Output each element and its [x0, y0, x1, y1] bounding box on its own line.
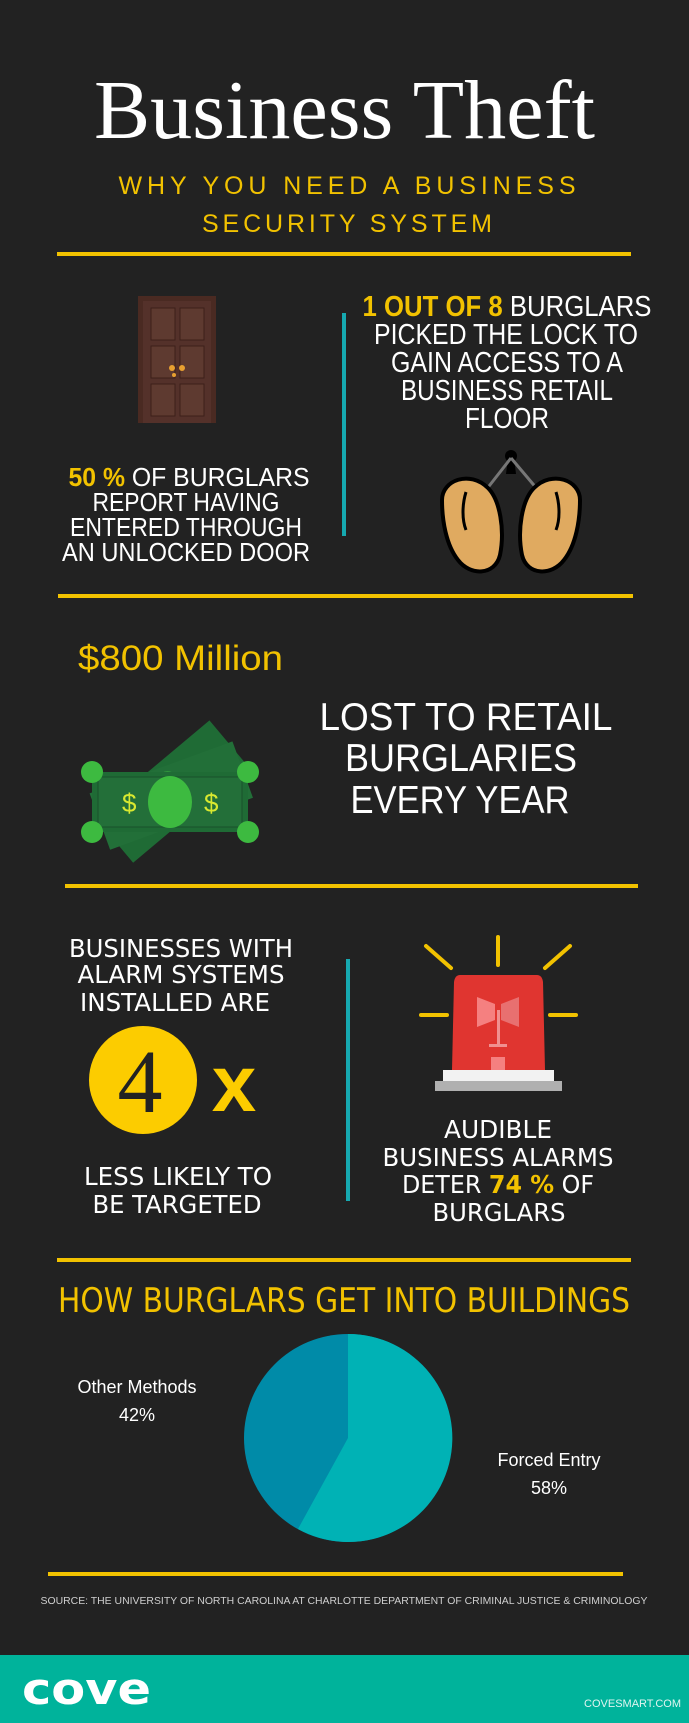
icon: money [81, 720, 259, 863]
text: 1 out of 8: FLOOR [465, 403, 549, 435]
icon: 4x badge: 4 [118, 1033, 162, 1132]
text: 1 out of 8: PICKED THE LOCK TO [374, 319, 638, 351]
text: 1 out of 8 [362, 291, 652, 435]
text: audible alarms: BUSINESS ALARMS [382, 1143, 614, 1172]
subtitle: SECURITY SYSTEM [202, 210, 492, 238]
label: other methods [77, 1377, 197, 1425]
source: SOURCE: THE UNIVERSITY OF NORTH CAROLINA AT CHARLOTTE DEPARTMENT OF CRIMINAL JUSTICE & CRIMINOLOGY [40, 1595, 648, 1607]
pie chart [244, 1334, 452, 1542]
text: audible alarms: BURGLARS [432, 1198, 566, 1227]
label: other methods: Other Methods [77, 1377, 197, 1397]
text: lost to retail: EVERY YEAR [350, 779, 570, 822]
text: lost to retail: LOST TO RETAIL [320, 696, 612, 739]
text: audible alarms [382, 1115, 614, 1227]
icon: hands picking lock [442, 450, 580, 571]
title: Business Theft [94, 64, 595, 157]
icon: 4x badge [89, 1026, 256, 1134]
text: audible alarms: AUDIBLE [444, 1115, 552, 1144]
text: businesses with alarm: INSTALLED ARE [80, 988, 270, 1017]
footer [0, 1655, 689, 1723]
text: lost to retail [320, 696, 612, 822]
subtitle [118, 172, 576, 238]
icon: money: $ [204, 767, 226, 797]
label: forced entry [497, 1450, 601, 1498]
label: other methods: 42% [119, 1405, 155, 1425]
text: lost to retail: BURGLARIES [345, 737, 577, 780]
text: 50% unlocked door: ENTERED THROUGH [70, 512, 302, 542]
label: forced entry: Forced Entry [497, 1450, 601, 1470]
icon: money: $ [204, 788, 219, 818]
text: businesses with alarm [69, 934, 293, 1219]
icon: 4x badge: x [212, 1039, 256, 1128]
divider [346, 959, 350, 1201]
logo: cove: cove [22, 1664, 151, 1715]
icon: door [138, 296, 216, 423]
text: 50% unlocked door: 50 % OF BURGLARS [68, 462, 310, 492]
text: 50% unlocked door [62, 462, 310, 567]
text: businesses with alarm: BUSINESSES WITH [69, 934, 293, 963]
text: 1 out of 8: GAIN ACCESS TO A [391, 347, 624, 379]
text: businesses with alarm: ALARM SYSTEMS [78, 960, 284, 989]
text: 50% unlocked door: REPORT HAVING [92, 487, 280, 517]
url: COVESMART.COM [584, 1698, 681, 1710]
text: audible alarms: DETER 74 % OF [402, 1170, 594, 1199]
stat: 800 million: $800 Million [78, 639, 283, 678]
text: businesses with alarm: LESS LIKELY TO [84, 1162, 272, 1191]
icon: money: $ [122, 788, 137, 818]
label: forced entry: 58% [531, 1478, 567, 1498]
divider [342, 313, 346, 536]
text: businesses with alarm: BE TARGETED [92, 1190, 262, 1219]
text: 1 out of 8: 1 OUT OF 8 BURGLARS [362, 291, 652, 323]
subtitle: WHY YOU NEED A BUSINESS [118, 172, 576, 200]
text: 50% unlocked door: AN UNLOCKED DOOR [62, 537, 310, 567]
text: 1 out of 8: BUSINESS RETAIL [401, 375, 613, 407]
icon: siren [421, 937, 576, 1091]
